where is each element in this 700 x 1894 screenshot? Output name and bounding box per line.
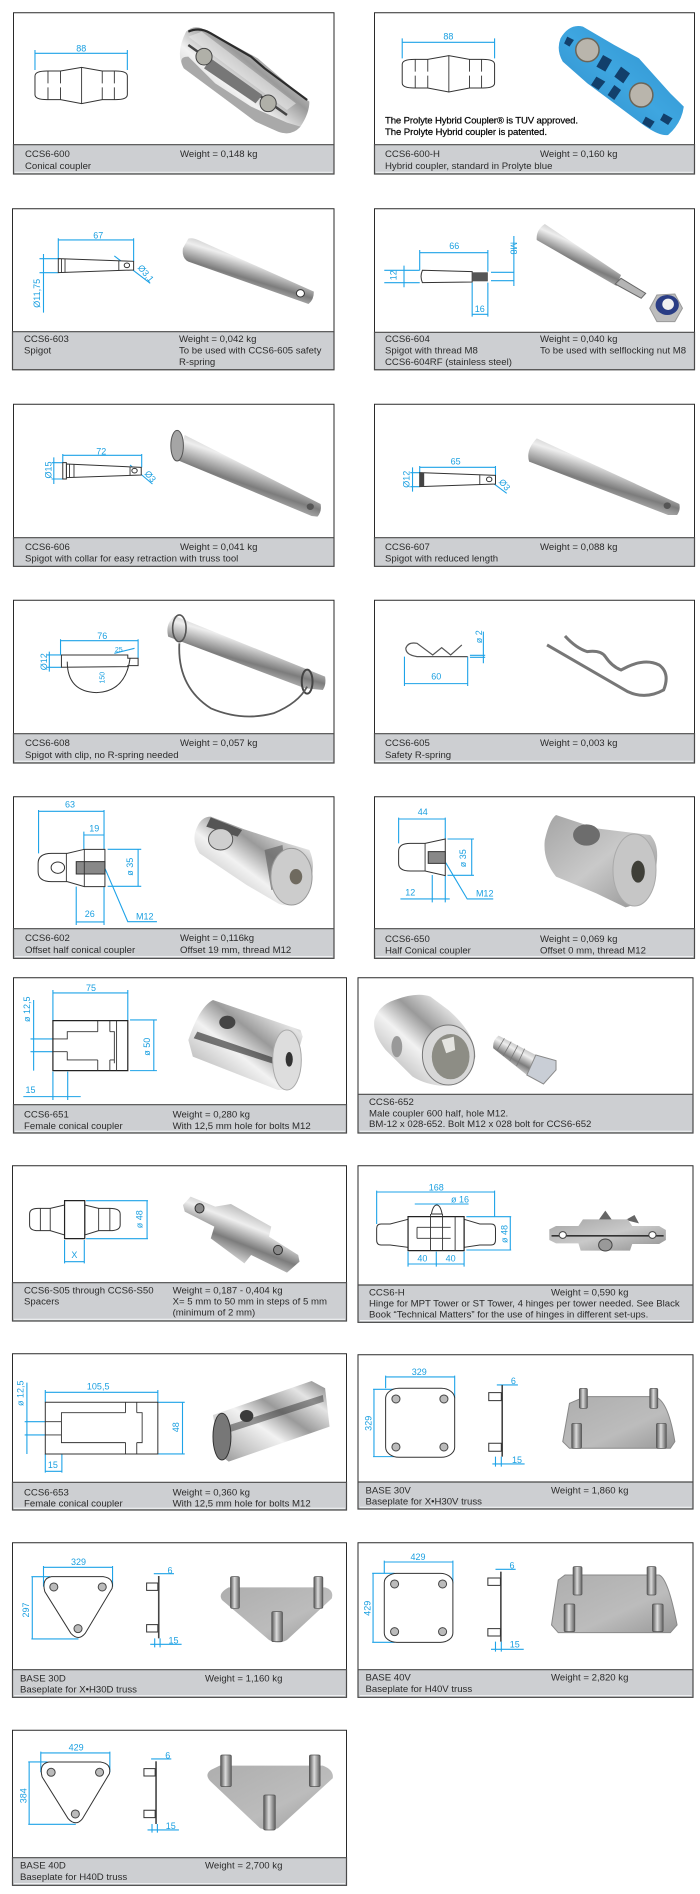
caption: X= 5 mm to 50 mm in steps of 5 mm <box>173 1297 327 1308</box>
caption: Weight = 0,148 kg <box>180 149 257 160</box>
note: TUV approved and patented: The Prolyte Hybrid Coupler® is TUV approved. <box>385 116 578 126</box>
caption: Weight = 0,116kg <box>180 933 254 944</box>
diagram: female conical coupler long: 105,5 <box>87 1381 109 1391</box>
caption <box>385 542 617 565</box>
caption: Female conical coupler <box>24 1499 123 1510</box>
caption: Spigot with thread M8 <box>385 346 478 356</box>
diagram: safety R-spring <box>404 630 485 686</box>
caption: CCS6-602 <box>25 933 70 944</box>
diagram: baseplate 30D: 6 <box>167 1565 173 1575</box>
photo: spigot with lanyard clip <box>167 615 325 717</box>
caption: (minimum of 2 mm) <box>173 1307 255 1318</box>
diagram: baseplate 40D: 6 <box>165 1751 170 1761</box>
caption: CCS6-652 <box>369 1097 414 1108</box>
caption: BM-12 x 028-652. Bolt M12 x 028 bolt for CCS6-652 <box>369 1119 591 1130</box>
diagram: spigot with clip <box>39 631 138 693</box>
diagram: baseplate 30V: 15 <box>512 1455 522 1465</box>
diagram: baseplate 40V <box>363 1552 524 1652</box>
diagram: female conical coupler long: ø 12,5 <box>16 1381 26 1406</box>
caption <box>25 542 257 565</box>
diagram: spacer: ø 48 <box>134 1210 144 1228</box>
diagram: spacer: X <box>71 1250 77 1260</box>
caption: CCS6-H <box>369 1287 405 1298</box>
caption <box>385 149 617 172</box>
caption: Spacers <box>24 1297 59 1308</box>
diagram: female conical coupler: 15 <box>25 1085 36 1095</box>
caption: Spigot with reduced length <box>385 554 498 565</box>
diagram: female conical coupler long <box>16 1381 185 1473</box>
diagram: safety R-spring: 60 <box>431 672 441 682</box>
diagram: baseplate 40D: 429 <box>69 1743 84 1753</box>
diagram: spigot with collar: Ø3 <box>143 469 158 484</box>
caption: Half Conical coupler <box>385 946 472 957</box>
caption: Weight = 0,040 kg <box>540 334 617 345</box>
caption: Baseplate for H40D truss <box>20 1872 127 1883</box>
caption: Weight = 0,360 kg <box>173 1487 250 1498</box>
caption: CCS6-603 <box>24 334 69 345</box>
panel: CCS6-600-H <box>374 13 694 174</box>
caption <box>24 1285 327 1318</box>
note: TUV approved and patented: The Prolyte Hybrid coupler is patented. <box>385 127 547 138</box>
diagram: spigot with thread M8 <box>384 236 519 317</box>
diagram: female conical coupler long: 48 <box>171 1422 181 1432</box>
caption: CCS6-653 <box>24 1487 69 1498</box>
diagram: hinge <box>377 1183 511 1267</box>
note: TUV approved and patented <box>385 116 578 138</box>
panel: CCS6-652 <box>358 978 693 1133</box>
diagram: baseplate 30D: 297 <box>21 1602 31 1618</box>
caption <box>369 1097 591 1130</box>
panel: CCS6-603 <box>12 209 334 370</box>
caption: CCS6-606 <box>25 542 70 553</box>
caption <box>24 334 322 368</box>
photo: female conical coupler long <box>213 1381 330 1462</box>
panel: CCS6-606 <box>14 404 334 566</box>
diagram: baseplate 30V <box>364 1367 525 1467</box>
diagram: half conical coupler: 12 <box>405 887 415 897</box>
diagram: offset half conical coupler: M12 <box>136 912 154 922</box>
diagram: baseplate 30D: 15 <box>168 1635 179 1645</box>
panel: CCS6-651 <box>14 978 346 1133</box>
caption <box>385 934 646 957</box>
diagram: offset half conical coupler: 63 <box>65 800 75 810</box>
diagram: half conical coupler: 44 <box>418 807 428 817</box>
diagram: hinge: ø 16 <box>451 1194 469 1204</box>
panel: CCS6-600 <box>14 13 334 174</box>
diagram: spigot with collar <box>43 446 158 484</box>
diagram: female conical coupler: ø 12,5 <box>22 997 32 1022</box>
caption: R-spring <box>179 357 215 368</box>
diagram: spigot with thread M8: 12 <box>389 270 399 280</box>
diagram: baseplate 40V: 429 <box>410 1552 426 1562</box>
diagram: spigot with dimensions <box>32 231 156 313</box>
photo: hinge <box>549 1211 666 1251</box>
caption: Baseplate for X•H30V truss <box>366 1497 482 1508</box>
caption <box>366 1485 628 1508</box>
diagram: spigot with clip: 25 <box>115 647 123 654</box>
diagram: hinge: 40 <box>417 1254 427 1264</box>
caption: Weight = 0,280 kg <box>173 1110 250 1121</box>
caption: BASE 40V <box>366 1673 411 1684</box>
caption: Conical coupler <box>25 161 92 172</box>
diagram: baseplate 40V: 15 <box>510 1639 520 1649</box>
caption <box>385 738 617 761</box>
caption <box>24 1110 311 1132</box>
diagram: baseplate 30D <box>21 1557 182 1647</box>
caption: BASE 30D <box>20 1673 66 1684</box>
diagram: offset half conical coupler: 19 <box>89 824 99 834</box>
caption: Weight = 1,160 kg <box>205 1673 282 1684</box>
photo: baseplate 30V <box>563 1388 675 1448</box>
caption <box>25 933 291 956</box>
caption: Weight = 0,590 kg <box>551 1287 628 1298</box>
diagram: female conical coupler: 75 <box>86 983 96 993</box>
caption: BASE 30V <box>366 1485 411 1496</box>
caption: Weight = 0,187 - 0,404 kg <box>173 1285 283 1296</box>
caption: Baseplate for H40V truss <box>366 1684 472 1695</box>
caption: BASE 40D <box>20 1861 66 1872</box>
diagram: spigot with reduced length <box>402 457 512 493</box>
diagram: spigot with thread M8: M8 <box>509 242 519 255</box>
panel: BASE 30D <box>12 1543 346 1697</box>
photo: spigot reduced length <box>528 438 680 515</box>
diagram: hinge: 40 <box>446 1254 456 1264</box>
caption: Offset half conical coupler <box>25 945 136 956</box>
caption: CCS6-651 <box>24 1110 69 1121</box>
caption: Weight = 2,820 kg <box>551 1673 628 1684</box>
diagram: conical coupler with 88 dimension: 88 <box>76 43 86 53</box>
photo: safety R-spring <box>547 636 666 695</box>
diagram: offset half conical coupler: 26 <box>85 909 95 919</box>
photo: baseplate 30D <box>221 1577 332 1642</box>
panel: CCS6-607 <box>374 404 694 566</box>
diagram: spigot with thread M8: 66 <box>449 241 459 251</box>
caption: With 12,5 mm hole for bolts M12 <box>173 1121 311 1132</box>
panel: BASE 30V <box>358 1355 693 1509</box>
caption: Weight = 0,069 kg <box>540 934 617 945</box>
caption: Baseplate for X•H30D truss <box>20 1685 137 1696</box>
diagram: hinge: 168 <box>429 1183 444 1193</box>
caption: CCS6-607 <box>385 542 430 553</box>
panel: CCS6-650 <box>374 797 694 958</box>
caption: To be used with CCS6-605 safety <box>179 346 322 356</box>
panel: BASE 40D <box>12 1730 346 1885</box>
diagram: baseplate 40D: 15 <box>166 1821 176 1831</box>
caption <box>369 1287 680 1320</box>
caption: Offset 19 mm, thread M12 <box>180 945 291 956</box>
photo: spacer <box>183 1197 300 1273</box>
caption <box>366 1673 628 1695</box>
caption: CCS6-604RF (stainless steel) <box>385 357 512 368</box>
diagram: spigot with clip: 76 <box>97 631 107 641</box>
caption: Weight = 2,700 kg <box>205 1861 282 1872</box>
diagram: spigot with reduced length: Ø3 <box>497 477 512 493</box>
diagram: spigot with reduced length: 65 <box>451 457 461 467</box>
diagram: spigot with dimensions: Ø11,75 <box>32 279 42 308</box>
diagram: spigot with collar: Ø15 <box>43 461 53 479</box>
photo: conical coupler <box>180 27 309 133</box>
photo: blue hybrid coupler <box>559 26 684 135</box>
photo: half conical coupler <box>544 815 657 907</box>
diagram: spigot with clip: Ø12 <box>39 653 49 670</box>
caption: CCS6-S05 through CCS6-S50 <box>24 1285 154 1296</box>
photo: offset half conical coupler <box>194 817 313 905</box>
photo: spigot with collar <box>171 430 321 517</box>
caption: CCS6-604 <box>385 334 430 345</box>
caption: Male coupler 600 half, hole M12. <box>369 1109 508 1120</box>
caption <box>25 738 257 761</box>
caption: Spigot with collar for easy retraction with truss tool <box>25 554 238 565</box>
caption: Female conical coupler <box>24 1121 123 1132</box>
panel: BASE 40V <box>358 1543 693 1697</box>
diagram: baseplate 40D <box>18 1743 179 1833</box>
diagram: spigot with dimensions: 67 <box>93 231 103 241</box>
diagram: half conical coupler: ø 35 <box>458 849 468 867</box>
caption: To be used with selflocking nut M8 <box>540 346 686 356</box>
diagram: female conical coupler long: 15 <box>48 1460 58 1470</box>
panel: CCS6-608 <box>14 600 334 763</box>
diagram: offset half conical coupler: ø 35 <box>125 858 135 876</box>
diagram: female conical coupler: ø 50 <box>142 1038 152 1056</box>
caption: Weight = 0,160 kg <box>540 149 617 160</box>
caption: CCS6-605 <box>385 738 430 749</box>
diagram: baseplate 40D: 384 <box>18 1788 28 1803</box>
caption: CCS6-608 <box>25 738 70 749</box>
panel: CCS6-602 <box>14 797 334 958</box>
caption: CCS6-600-H <box>385 149 440 160</box>
diagram: half conical coupler: M12 <box>476 888 493 898</box>
caption: CCS6-600 <box>25 149 70 160</box>
diagram: baseplate 30V: 6 <box>511 1376 516 1386</box>
panel: CCS6-S05 through CCS6-S50 <box>12 1166 346 1321</box>
diagram: hybrid coupler with 88 dimension: 88 <box>443 32 453 42</box>
diagram: hybrid coupler with 88 dimension <box>402 32 495 92</box>
caption: Spigot with clip, no R-spring needed <box>25 750 179 761</box>
caption: Weight = 0,041 kg <box>180 542 257 553</box>
photo: spigot <box>183 238 314 304</box>
caption <box>25 149 257 172</box>
diagram: baseplate 30D: 329 <box>71 1557 86 1567</box>
diagram: hinge: ø 48 <box>499 1225 509 1243</box>
diagram: safety R-spring: ø 2 <box>474 630 484 643</box>
caption: Weight = 1,860 kg <box>551 1485 628 1496</box>
panel: CCS6-653 <box>12 1354 346 1510</box>
diagram: spigot with dimensions: Ø3,1 <box>136 263 156 284</box>
diagram: spigot with collar: 72 <box>96 446 106 456</box>
panel: CCS6-605 <box>374 600 694 763</box>
caption: Book “Technical Matters” for the use of hinges in different set-ups. <box>369 1309 648 1320</box>
diagram: spigot with thread M8: 16 <box>475 304 485 314</box>
caption: Weight = 0,057 kg <box>180 738 257 749</box>
diagram: baseplate 40V: 6 <box>509 1561 515 1571</box>
caption: Offset 0 mm, thread M12 <box>540 946 646 957</box>
caption: Spigot <box>24 346 52 356</box>
diagram: baseplate 40V: 429 <box>363 1601 373 1616</box>
panel: CCS6-604 <box>374 209 694 370</box>
caption <box>385 334 686 368</box>
photo: baseplate 40V <box>552 1567 677 1633</box>
panel: CCS6-H <box>358 1166 693 1322</box>
caption <box>24 1487 311 1510</box>
diagram: baseplate 30V: 329 <box>412 1367 427 1377</box>
caption: Weight = 0,042 kg <box>179 334 256 345</box>
photo: threaded spigot and selflocking nut <box>537 224 682 322</box>
diagram: spigot with clip: 150 <box>99 672 106 684</box>
caption: Weight = 0,088 kg <box>540 542 617 553</box>
caption: Safety R-spring <box>385 750 451 761</box>
caption: Hinge for MPT Tower or ST Tower, 4 hinges per tower needed. See Black <box>369 1299 680 1310</box>
photo: male coupler half and bolt <box>374 995 556 1086</box>
diagram: baseplate 30V: 329 <box>364 1416 374 1431</box>
diagram: conical coupler with 88 dimension <box>35 43 127 104</box>
caption: CCS6-650 <box>385 934 430 945</box>
diagram: spigot with reduced length: Ø12 <box>402 471 412 488</box>
caption: With 12,5 mm hole for bolts M12 <box>173 1499 311 1510</box>
photo: female conical coupler <box>188 1000 303 1090</box>
photo: baseplate 40D <box>207 1755 333 1830</box>
diagram: offset half conical coupler <box>38 800 157 925</box>
caption <box>20 1673 282 1696</box>
caption: Weight = 0,003 kg <box>540 738 617 749</box>
diagram: half conical coupler <box>399 807 493 902</box>
diagram: spacer <box>30 1201 148 1263</box>
caption <box>20 1861 282 1883</box>
caption: Hybrid coupler, standard in Prolyte blue <box>385 161 552 172</box>
diagram: female conical coupler <box>22 983 157 1100</box>
